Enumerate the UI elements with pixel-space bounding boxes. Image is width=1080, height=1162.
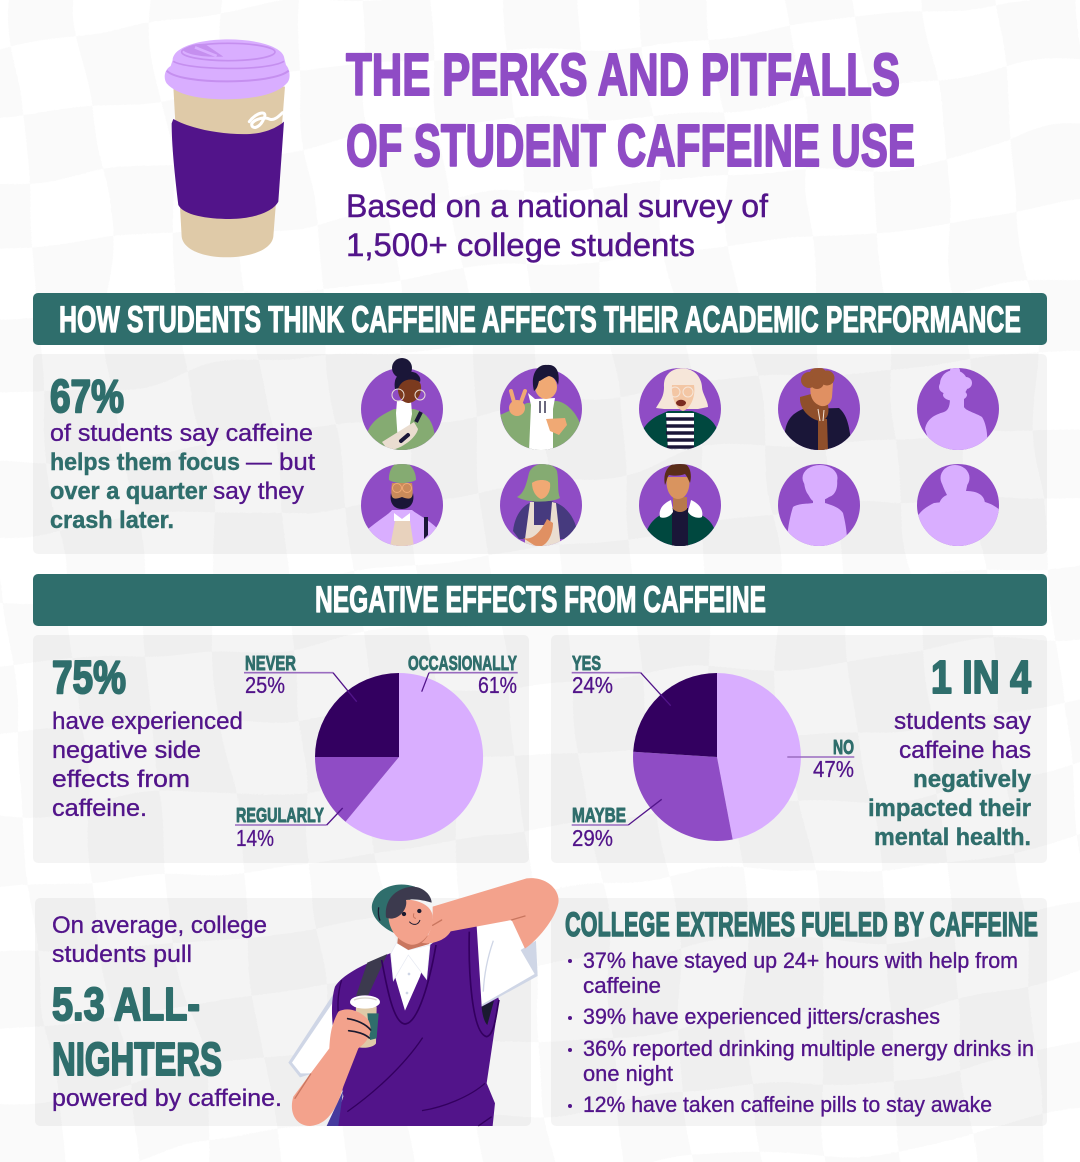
stat: 5.3 all-nighters: [52, 978, 222, 1085]
pie chart: mental health impact: [633, 673, 801, 841]
icon: student portrait, blonde with glasses: [639, 368, 721, 451]
label: yes 24%: 24%: [572, 672, 613, 698]
text: mental health description: students say: [894, 708, 1031, 735]
text: powered by caffeine: powered by caffeine.: [52, 1085, 282, 1112]
label: maybe 29%: [572, 799, 662, 851]
label: never 25%: [244, 653, 357, 702]
subtitle: 1,500+ college students: [346, 227, 695, 263]
subtitle: Based on a national survey of: [346, 188, 768, 224]
label: occasionally 61%: [408, 653, 518, 698]
text: side effects description: effects from: [52, 766, 190, 793]
text: side effects description: [52, 708, 243, 822]
list: extremes bullets: 39% have experienced jitters/crashes: [583, 1004, 940, 1029]
label: yes 24%: YES: [572, 653, 601, 675]
label: yes 24%: [572, 653, 671, 706]
icon: student portrait, shearling collar: [639, 463, 721, 547]
text: focus description: crash later.: [50, 507, 174, 534]
stat: 67%: 67%: [50, 370, 124, 422]
icon: coffee cup: [165, 39, 290, 257]
text: focus description: of students say caffeine: [50, 420, 313, 447]
panel: mental health: [551, 635, 1047, 863]
label: never 25%: NEVER: [245, 653, 296, 675]
label: occasionally 61%: OCCASIONALLY: [408, 653, 517, 675]
text: side effects description: caffeine.: [52, 795, 147, 822]
list: extremes bullets: 37% have stayed up 24+ hours with help from: [583, 948, 1018, 973]
label: regularly 14%: REGULARLY: [236, 805, 324, 827]
panel: all-nighters: [35, 898, 531, 1126]
label: regularly 14%: [235, 805, 343, 851]
icon: silhouette portrait, short hair: [778, 464, 860, 547]
icon: student portrait, green beanie: [361, 461, 443, 547]
title: [346, 42, 915, 179]
icon: student portrait, hoop earrings: [361, 358, 443, 451]
label: maybe 29%: 29%: [572, 825, 613, 851]
subtitle: [346, 188, 768, 263]
panel: focus statistic and portraits: [33, 354, 1047, 554]
banner: negative effects heading: [33, 574, 1047, 626]
illustration: student holding coffee: [288, 878, 559, 1126]
stat: 1 in 4: 1 IN 4: [931, 651, 1031, 703]
label: maybe 29%: MAYBE: [572, 805, 626, 827]
list: extremes bullets: 36% reported drinking multiple energy drinks in: [583, 1036, 1034, 1061]
text: side effects description: negative side: [52, 737, 201, 764]
text: side effects description: have experienced: [52, 708, 243, 735]
label: regularly 14%: 14%: [236, 825, 274, 851]
text: mental health description: [868, 708, 1032, 851]
text: mental health description: mental health.: [874, 824, 1031, 851]
text: mental health description: caffeine has: [899, 737, 1031, 764]
label: occasionally 61%: 61%: [478, 672, 517, 698]
text: mental health description: negatively: [913, 766, 1032, 793]
list: extremes bullets: one night: [583, 1061, 673, 1086]
icon: student portrait, curly hair and scarf: [778, 367, 860, 451]
list: extremes bullets: [568, 948, 1034, 1117]
label: no 47%: [787, 737, 854, 782]
icon: student portrait, green bob: [500, 464, 582, 547]
label: no 47%: NO: [833, 737, 854, 759]
panel: college extremes: [551, 898, 1047, 1126]
text: focus description: [50, 420, 315, 534]
text: focus description: — but: [246, 449, 315, 476]
icon: student portrait, peace sign: [500, 365, 582, 451]
text: focus description: say they: [213, 478, 304, 505]
icon: silhouette portrait, bun hair: [914, 464, 1002, 547]
text: focus description: helps them focus: [50, 449, 240, 476]
stat: 5.3 all-nighters: NIGHTERS: [52, 1033, 222, 1085]
text: all-nighters intro: students pull: [52, 941, 192, 968]
panel: side effects: [33, 635, 529, 863]
banner: negative effects heading: NEGATIVE EFFECTS FROM CAFFEINE: [315, 579, 766, 620]
text: mental health description: impacted their: [868, 795, 1031, 822]
text: all-nighters intro: [52, 912, 267, 968]
pie chart: side effect frequency: [315, 673, 483, 841]
icon: silhouette portrait, updo: [917, 366, 999, 451]
text: focus description: over a quarter: [50, 478, 207, 505]
list: extremes bullets: caffeine: [583, 973, 661, 998]
label: no 47%: 47%: [813, 756, 854, 782]
text: all-nighters intro: On average, college: [52, 912, 267, 939]
stat: 75%: 75%: [52, 651, 126, 703]
list: extremes bullets: 12% have taken caffeine pills to stay awake: [583, 1092, 992, 1117]
stat: 5.3 all-nighters: 5.3 ALL-: [52, 978, 200, 1030]
label: never 25%: 25%: [245, 672, 285, 698]
